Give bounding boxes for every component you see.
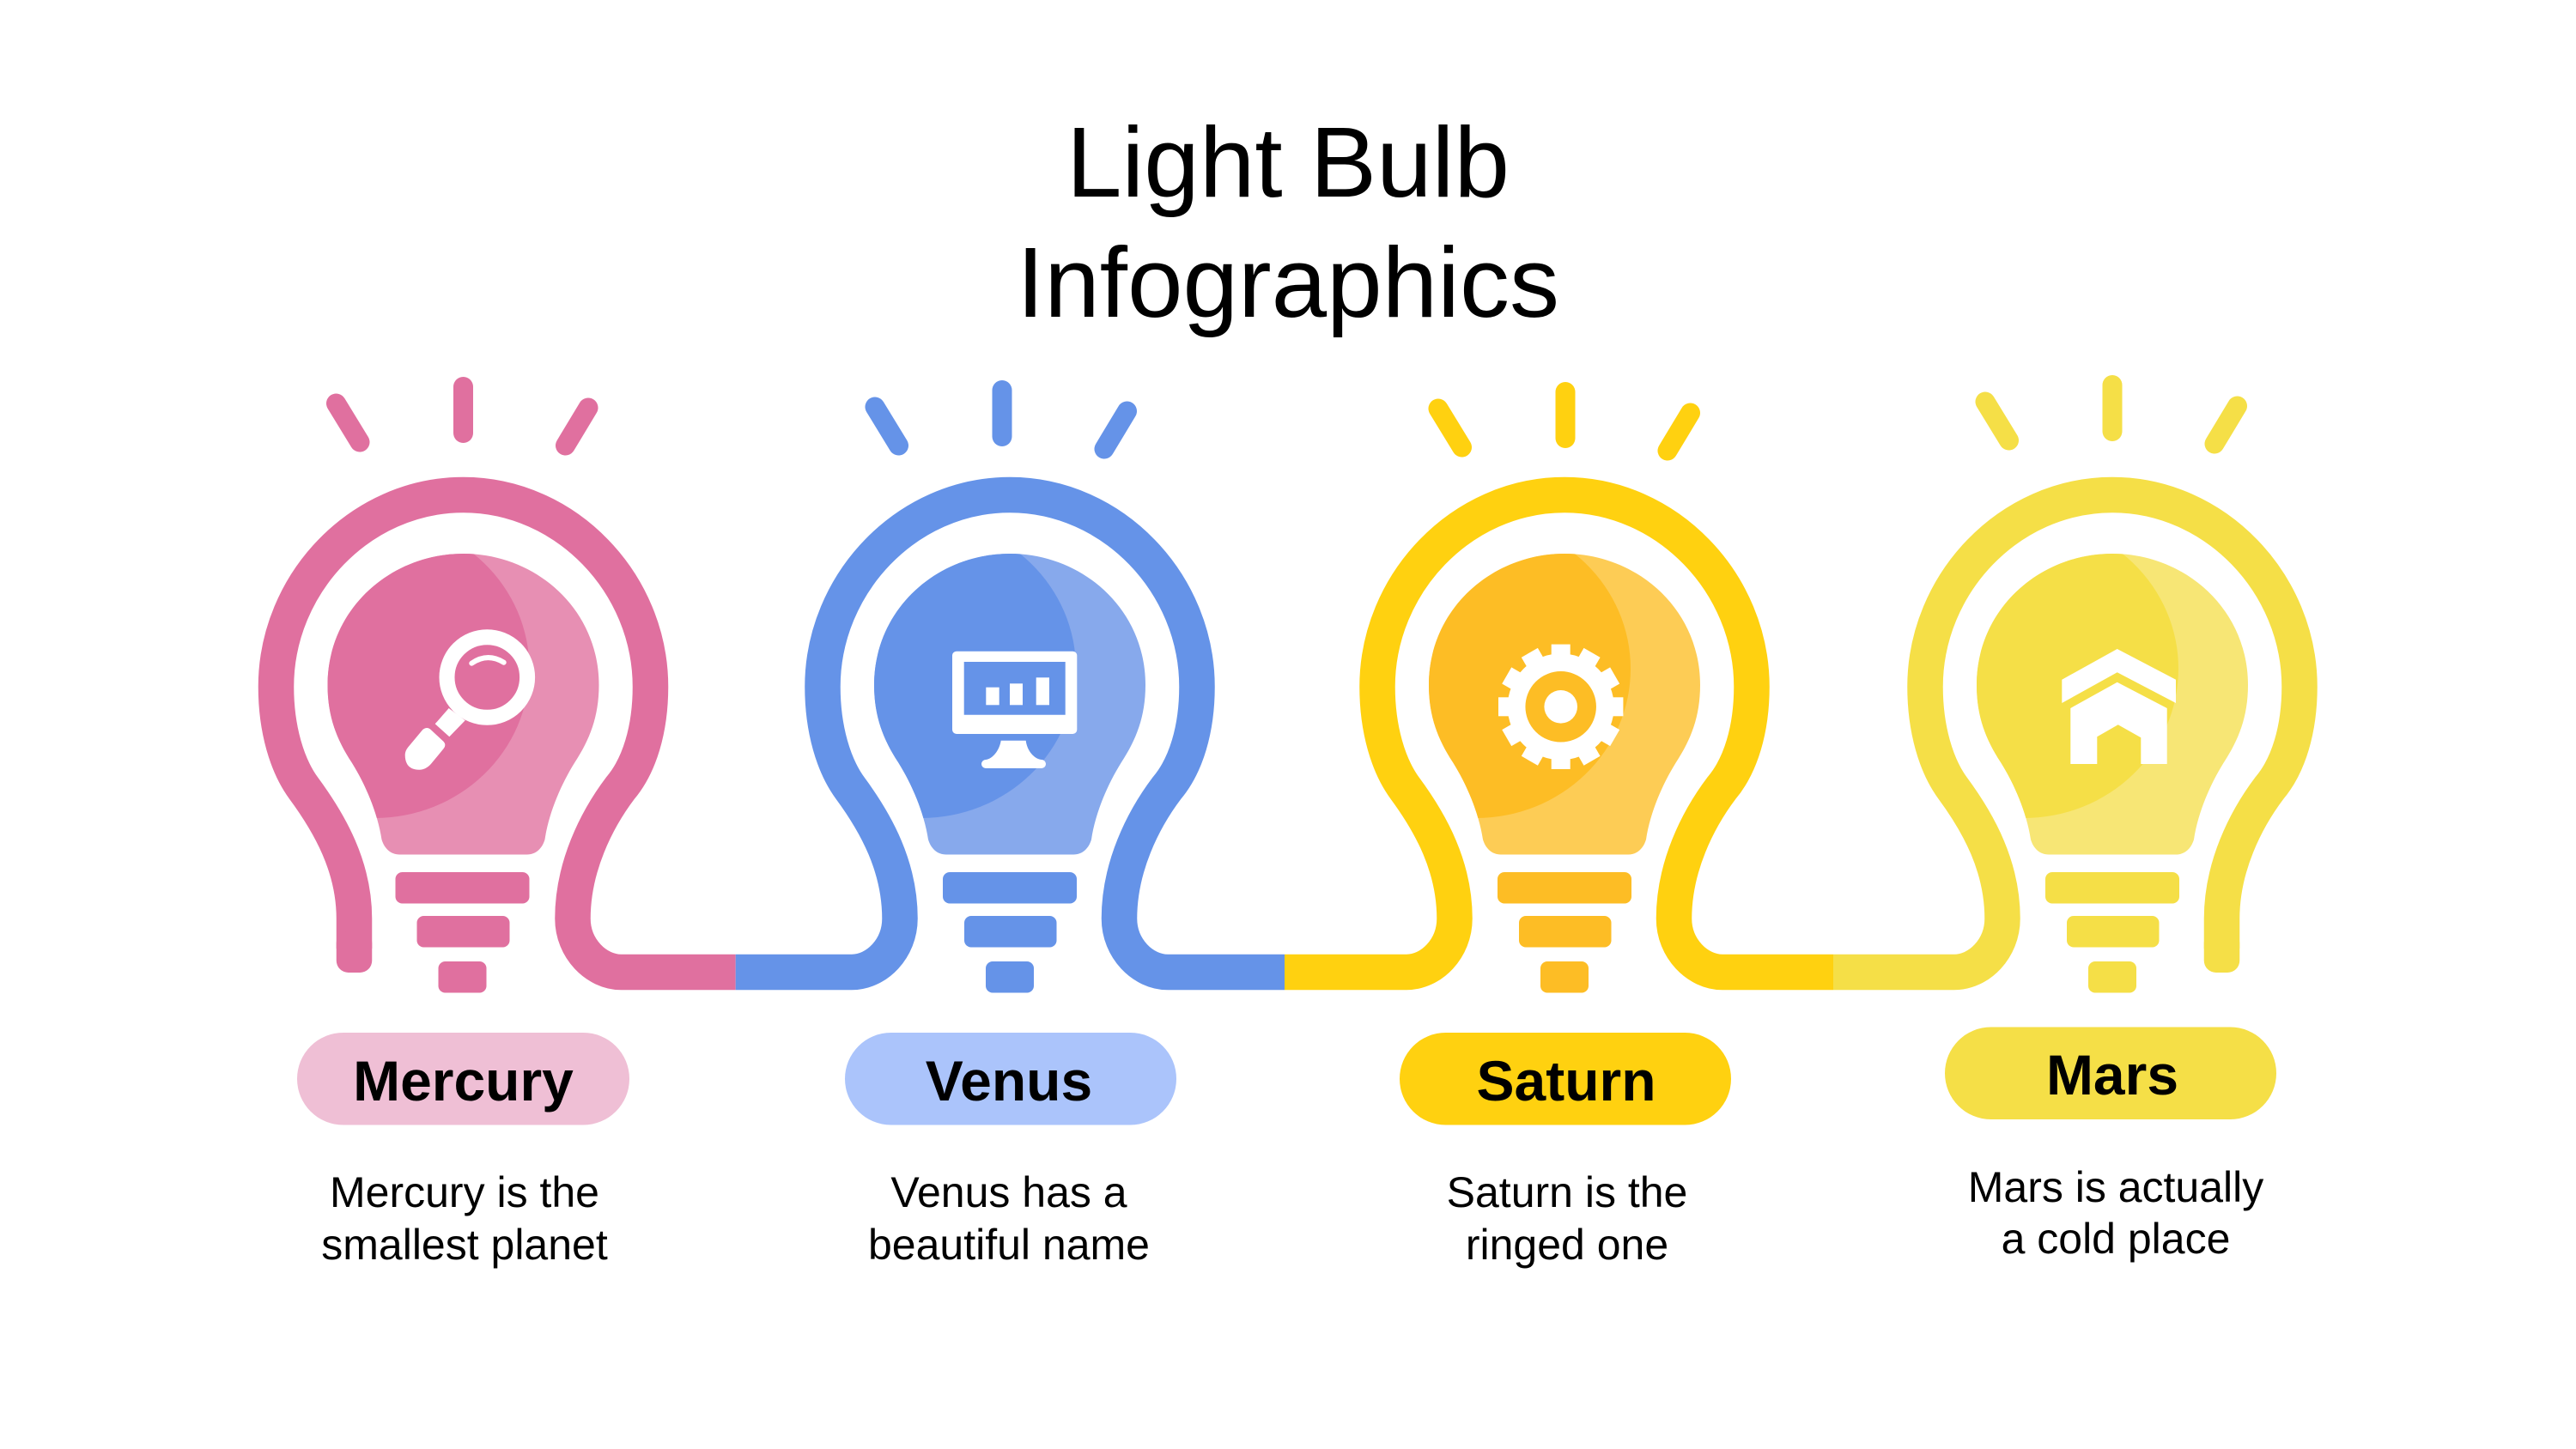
- label pill: Saturn: [1400, 1033, 1731, 1125]
- description: Saturn: Saturn is the: [1447, 1168, 1687, 1216]
- icon: magnifying glass: [405, 637, 527, 770]
- panel: Mars bulb: [1833, 385, 2300, 992]
- description: Mars: Mars is actually: [1968, 1163, 2263, 1211]
- description: Mars: [1968, 1163, 2263, 1263]
- bulb base: [395, 872, 529, 992]
- panel: Saturn bulb: [1285, 391, 1833, 992]
- title: [1017, 106, 1559, 338]
- bulb outline with connectors: [1285, 494, 1833, 972]
- panel: Mercury bulb: [220, 386, 736, 992]
- title: Light Bulb: [1066, 106, 1510, 218]
- icon: monitor with bar chart: [952, 652, 1077, 768]
- bulb outline with connector: [276, 494, 736, 973]
- description: Saturn: [1447, 1168, 1687, 1269]
- description: Venus: beautiful name: [868, 1221, 1150, 1269]
- bulb outline with connector: [1833, 494, 2300, 973]
- bulb glass: [874, 554, 1145, 855]
- description: Mars: a cold place: [2002, 1215, 2230, 1263]
- bulb outline with connectors: [736, 494, 1285, 972]
- label pill: Mars: [1945, 1027, 2276, 1119]
- bulb base: [943, 872, 1077, 992]
- description: Mercury: smallest planet: [321, 1221, 608, 1269]
- bulb glass: [328, 554, 599, 855]
- description: Mercury: Mercury is the: [330, 1168, 599, 1216]
- label pill: Saturn: Saturn: [1476, 1049, 1656, 1113]
- bulb base: [2045, 872, 2179, 992]
- label pill: Mars: Mars: [2046, 1043, 2178, 1106]
- description: Mercury: [321, 1168, 608, 1269]
- icon: gear: [1498, 645, 1623, 769]
- label pill: Mercury: Mercury: [353, 1049, 574, 1113]
- description: Venus: [868, 1168, 1150, 1269]
- label pill: Venus: [845, 1033, 1176, 1125]
- light rays: [1985, 385, 2238, 444]
- label pill: Venus: Venus: [926, 1049, 1092, 1113]
- label pill: Mercury: [297, 1033, 629, 1125]
- bulb glass: [1429, 554, 1700, 855]
- bulb glass: [1977, 554, 2248, 855]
- description: Saturn: ringed one: [1466, 1221, 1668, 1269]
- icon: house: [2062, 649, 2176, 764]
- light rays: [1438, 391, 1690, 451]
- panel: Venus bulb: [736, 390, 1285, 992]
- description: Venus: Venus has a: [890, 1168, 1127, 1216]
- light rays: [337, 386, 588, 446]
- light rays: [875, 390, 1127, 449]
- bulb base: [1498, 872, 1631, 992]
- title: Infographics: [1017, 227, 1559, 338]
